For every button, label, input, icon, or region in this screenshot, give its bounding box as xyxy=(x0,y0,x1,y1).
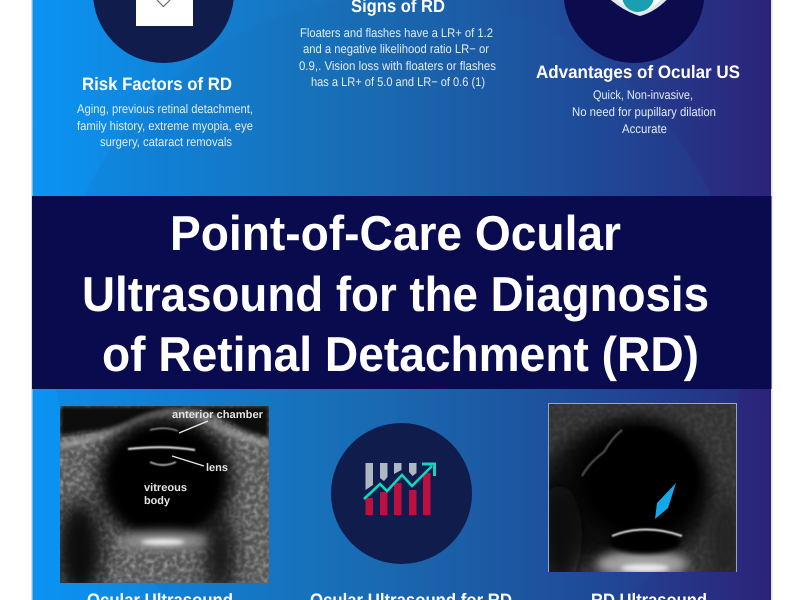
image: retinal detachment ultrasound xyxy=(548,403,737,572)
image: labelled ocular ultrasound: anterior chamber xyxy=(172,409,264,421)
panel: signs of RD xyxy=(299,0,496,89)
text: advantages body: Accurate xyxy=(622,122,667,136)
title: Point-of-Care Ocular xyxy=(170,207,621,261)
title: Ultrasound for the Diagnosis xyxy=(82,268,709,322)
text: risk factors body xyxy=(77,102,253,149)
image: labelled ocular ultrasound: vitreous xyxy=(144,482,187,494)
image: labelled ocular ultrasound: body xyxy=(144,495,171,507)
panel: advantages of ocular US xyxy=(536,0,740,136)
text: signs body: Floaters and flashes have a LR+ of 1.2 xyxy=(300,26,493,40)
panel: RD ultrasound xyxy=(538,403,741,600)
image: labelled ocular ultrasound xyxy=(60,406,269,583)
text: advantages body: No need for pupillary dilation xyxy=(572,105,716,119)
text: risk factors body: surgery, cataract removals xyxy=(100,135,232,149)
icon: clipboard with heart xyxy=(93,0,234,63)
panel: risk factors of RD xyxy=(77,0,253,149)
title: of Retinal Detachment (RD) xyxy=(102,328,699,382)
text: advantages body: Quick, Non-invasive, xyxy=(593,88,693,102)
icon: chart with rising arrow xyxy=(331,423,472,564)
title xyxy=(82,207,709,382)
text: risk factors body: family history, extreme myopia, eye xyxy=(77,119,253,133)
heading: advantages: Advantages of Ocular US xyxy=(536,62,740,82)
heading: risk factors: Risk Factors of RD xyxy=(82,74,232,94)
icon: blue arrow xyxy=(655,483,676,519)
panel: ocular ultrasound for RD xyxy=(310,423,512,600)
text: risk factors body: Aging, previous retinal detachment, xyxy=(77,102,253,116)
text: signs body: has a LR+ of 5.0 and LR− of 0.6 (1) xyxy=(311,75,485,89)
icon: eye xyxy=(564,0,704,63)
text: signs body xyxy=(299,26,496,89)
text: advantages body xyxy=(572,88,716,136)
image: labelled ocular ultrasound: lens xyxy=(206,462,228,474)
title band xyxy=(32,196,772,389)
text: signs body: 0.9,. Vision loss with floaters or flashes xyxy=(299,59,496,73)
panel: ocular ultrasound xyxy=(56,406,269,600)
text: signs body: and a negative likelihood ratio LR− or xyxy=(303,42,489,56)
